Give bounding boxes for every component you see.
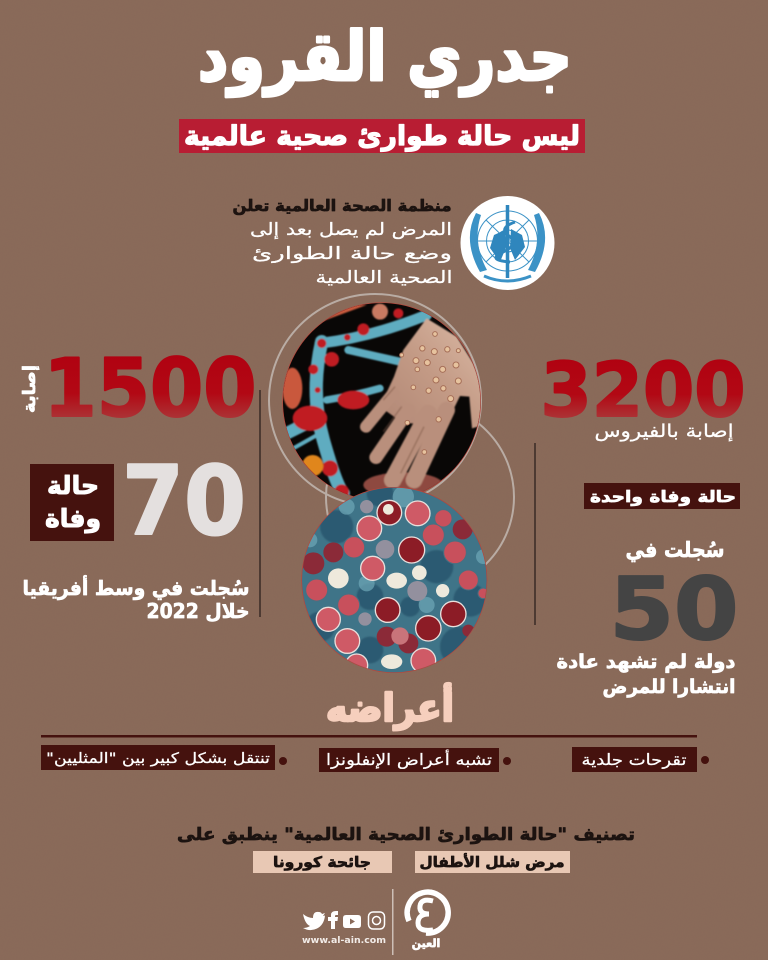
stat: recorded in 50 countries: انتشارا للمرض <box>602 676 736 698</box>
tag: corona: جائحة كورونا <box>273 855 371 871</box>
symptom: transmission: تنتقل بشكل كبير بين "المثليين" <box>46 751 270 767</box>
box: death cases: وفاة <box>45 504 101 534</box>
divider right <box>534 443 536 625</box>
WHO announcement text: وضع حالة الطوارئ <box>252 244 452 264</box>
photo: virus particles micrograph <box>300 480 491 676</box>
box: death cases: حالة <box>47 471 99 500</box>
divider left <box>259 390 261 617</box>
icon: Al-Ain logo: العين <box>412 937 440 950</box>
footer divider <box>392 889 394 955</box>
symptom: flu-like: تشبه أعراض الإنفلونزا <box>326 749 492 769</box>
text: central Africa note: سُجلت في وسط أفريقيا <box>22 574 250 601</box>
WHO announcement text: منظمة الصحة العالمية تعلن <box>232 197 452 215</box>
text: classification note: تصنيف "حالة الطوارئ الصحية العالمية" ينطبق على <box>177 825 635 845</box>
tag: corona <box>253 851 392 873</box>
title: جدري القرود <box>198 18 572 97</box>
stat: 3200 cases: 3200 <box>540 346 746 434</box>
heading: symptoms: أعراضه <box>326 683 454 730</box>
icon: Al-Ain logo <box>407 892 448 950</box>
stat: 3200 cases: إصابة بالفيروس <box>594 421 734 442</box>
tag: polio <box>415 851 570 873</box>
ring: upper <box>269 294 481 506</box>
icon: twitter <box>303 912 325 930</box>
symptom: flu-like <box>319 748 511 772</box>
website url: www.al-ain.com <box>302 936 386 946</box>
text: central Africa note: خلال 2022 <box>146 599 250 623</box>
WHO announcement text: المرض لم يصل بعد إلى <box>250 220 452 240</box>
stat: 1500 cases: 1500 <box>44 342 256 435</box>
photo: hand with monkeypox lesions <box>282 302 481 496</box>
stat: recorded in 50 countries: سُجلت في <box>626 538 724 562</box>
WHO announcement text <box>232 197 452 288</box>
stat: recorded in 50 countries: 50 <box>610 560 738 660</box>
rule under symptoms <box>41 735 697 738</box>
icon: facebook <box>328 911 338 929</box>
symptom: transmission <box>41 745 287 770</box>
symptom: skin ulcers <box>572 747 709 772</box>
icon: WHO logo <box>460 196 554 290</box>
subtitle banner: ليس حالة طوارئ صحية عالمية <box>184 121 580 152</box>
stat: 70 deaths: 70 <box>122 447 246 557</box>
social icons <box>303 911 384 930</box>
symptom: skin ulcers: تقرحات جلدية <box>582 751 686 769</box>
stat: 1500 cases: إصابة <box>20 365 40 413</box>
ring: lower <box>326 403 514 591</box>
icon: youtube <box>343 915 361 928</box>
tag: polio: مرض شلل الأطفال <box>420 853 564 871</box>
icon: instagram <box>368 912 384 929</box>
box: one death: حالة وفاة واحدة <box>590 487 736 506</box>
WHO announcement text: الصحية العالمية <box>316 268 452 288</box>
box: death cases <box>30 464 114 541</box>
box: one death <box>584 483 740 509</box>
text: central Africa note <box>22 574 250 623</box>
stat: recorded in 50 countries: دولة لم تشهد عادة <box>556 651 736 673</box>
stat: recorded in 50 countries <box>556 538 738 698</box>
